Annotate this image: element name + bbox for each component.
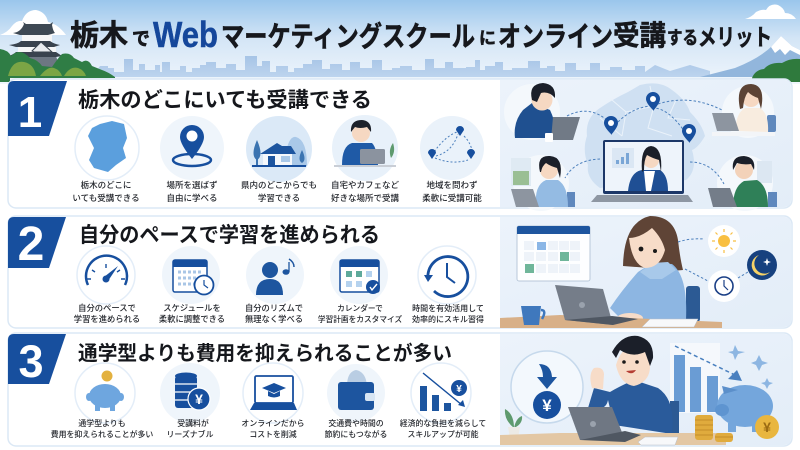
item: calendar with clock: 柔軟に調整できる bbox=[159, 314, 225, 324]
item: pin: 場所を選ばず bbox=[166, 180, 218, 190]
yen cost circle: ¥ bbox=[542, 396, 552, 415]
item: coin stack with yen bbox=[160, 363, 220, 439]
panel 1 illustration: learners around Tochigi map bbox=[500, 80, 791, 211]
plant bbox=[505, 409, 522, 438]
title: Web bbox=[153, 14, 218, 55]
wall calendar bbox=[517, 226, 590, 281]
badge 3 bbox=[8, 334, 66, 387]
item: laptop with graduation cap: コストを削減 bbox=[249, 429, 297, 439]
title: で bbox=[132, 29, 150, 50]
item: clock with back arrow: 効率的にスキル習得 bbox=[412, 314, 484, 324]
badge 3: 3 bbox=[18, 336, 44, 387]
dashed motion lines bbox=[678, 239, 748, 281]
savings chart bbox=[670, 343, 742, 413]
cloud: left bbox=[0, 10, 66, 35]
item: calendar with check: 学習計画をカスタマイズ bbox=[318, 314, 402, 324]
panel 1 bbox=[8, 79, 792, 211]
panel 2 illustration: woman planning study bbox=[500, 216, 791, 328]
item: calendar with clock: スケジュールを bbox=[163, 303, 221, 313]
yen coin: ¥ bbox=[763, 419, 771, 435]
title: メリット bbox=[698, 24, 772, 50]
item: route pins: 柔軟に受講可能 bbox=[422, 193, 482, 203]
item: map: 栃木のどこに bbox=[81, 180, 131, 190]
item: coin stack with yen: ¥ bbox=[195, 391, 203, 407]
notebook bbox=[638, 437, 678, 445]
item: piggy bank: 費用を抑えられることが多い bbox=[51, 429, 153, 439]
item: wallet: 節約にもつながる bbox=[325, 429, 387, 439]
badge 2 bbox=[8, 217, 66, 271]
castle bbox=[9, 22, 62, 68]
mug bbox=[521, 306, 544, 325]
item: person with music note: 自分のリズムで bbox=[245, 303, 303, 313]
panel 3 card bbox=[8, 333, 792, 446]
item: coin stack with yen: 受講料が bbox=[177, 418, 209, 428]
item: house bbox=[241, 116, 317, 203]
panel 2 bbox=[8, 216, 792, 328]
item: house: 県内のどこからでも bbox=[241, 180, 317, 190]
title: マーケティングスクール bbox=[221, 20, 475, 52]
item: piggy bank: 通学型よりも bbox=[78, 418, 126, 428]
sparkles bbox=[728, 345, 773, 389]
item: person with music note bbox=[245, 246, 304, 324]
item: house: 学習できる bbox=[258, 193, 300, 203]
desk bbox=[500, 433, 726, 445]
trees: right bbox=[752, 59, 800, 82]
learner: top left bbox=[504, 83, 580, 142]
learner: top right bbox=[712, 84, 776, 138]
badge 1 bbox=[8, 81, 67, 137]
trees: highlights bbox=[8, 62, 86, 76]
skyline bbox=[92, 56, 710, 77]
item: map: いても受講できる bbox=[72, 193, 140, 203]
title: する bbox=[667, 28, 698, 48]
item: calendar with check: カレンダーで bbox=[337, 303, 383, 313]
title bbox=[70, 14, 772, 55]
item: pin: 自由に学べる bbox=[166, 193, 218, 203]
title: に bbox=[479, 29, 496, 48]
item: map bbox=[72, 116, 140, 203]
dashed connections bbox=[565, 100, 724, 184]
item: route pins bbox=[420, 116, 484, 203]
panel 3 illustration: man saving money bbox=[500, 334, 791, 445]
item: person at laptop: 好きな場所で受講 bbox=[331, 193, 399, 203]
mountain: snow peak bbox=[700, 36, 800, 77]
pins bbox=[604, 92, 696, 143]
item: falling cost chart: 経済的な負担を減らして bbox=[400, 418, 486, 428]
item: wallet bbox=[325, 364, 387, 439]
laptop bbox=[555, 285, 638, 325]
yen coin bbox=[755, 415, 779, 439]
item: gauge: 学習を進められる bbox=[74, 314, 140, 324]
sun badge bbox=[708, 225, 740, 257]
item: falling cost chart: ¥ bbox=[456, 384, 462, 395]
item: laptop with graduation cap bbox=[241, 363, 305, 439]
laptop bbox=[568, 407, 641, 442]
title: 栃木 bbox=[70, 19, 128, 52]
woman bbox=[610, 216, 700, 323]
item: person at laptop: 自宅やカフェなど bbox=[331, 180, 399, 190]
trees: left bbox=[0, 49, 115, 82]
learner: bottom right bbox=[708, 155, 777, 211]
item: person at laptop bbox=[331, 115, 399, 203]
panel 1 card bbox=[8, 79, 792, 208]
yen cost circle bbox=[511, 351, 583, 423]
map of Tochigi bbox=[585, 83, 705, 188]
panel 3 bbox=[8, 333, 792, 446]
item: person with music note: 無理なく学べる bbox=[245, 314, 303, 324]
map boundaries bbox=[600, 86, 690, 136]
item: laptop with graduation cap: オンラインだから bbox=[241, 419, 305, 428]
panel 2 card bbox=[8, 216, 792, 328]
badge 2: 2 bbox=[18, 218, 44, 271]
item: gauge bbox=[74, 246, 140, 324]
laptop with instructor bbox=[591, 140, 693, 202]
learner: bottom left bbox=[511, 155, 575, 211]
piggy bank bbox=[715, 385, 773, 432]
desk bbox=[500, 315, 722, 328]
title: オンライン bbox=[498, 21, 613, 52]
item: calendar with check bbox=[318, 246, 402, 324]
item: falling cost chart bbox=[400, 363, 486, 439]
item: calendar with clock bbox=[159, 246, 225, 324]
item: route pins: 地域を問わず bbox=[426, 180, 478, 190]
heading 2: 自分のペースで学習を進められる bbox=[79, 224, 380, 247]
item: wallet: 交通費や時間の bbox=[328, 418, 384, 428]
item: clock with back arrow bbox=[412, 246, 484, 324]
heading 1: 栃木のどこにいても受講できる bbox=[78, 89, 372, 112]
notebook bbox=[642, 319, 698, 327]
item: falling cost chart: スキルアップが可能 bbox=[407, 429, 479, 439]
heading 3: 通学型よりも費用を抑えられることが多い bbox=[78, 341, 452, 365]
coin stacks bbox=[695, 415, 733, 442]
item: piggy bank bbox=[51, 363, 153, 439]
moon badge bbox=[747, 250, 777, 280]
badge 1: 1 bbox=[18, 88, 42, 137]
item: clock with back arrow: 時間を有効活用して bbox=[412, 303, 484, 313]
man bbox=[588, 336, 679, 435]
header background bbox=[0, 0, 800, 84]
item: gauge: 自分のペースで bbox=[78, 303, 136, 313]
item: coin stack with yen: リーズナブル bbox=[167, 429, 214, 439]
cloud: right bbox=[745, 5, 796, 19]
clock badge bbox=[708, 270, 740, 302]
title: 受講 bbox=[613, 20, 666, 51]
item: pin bbox=[160, 116, 224, 203]
